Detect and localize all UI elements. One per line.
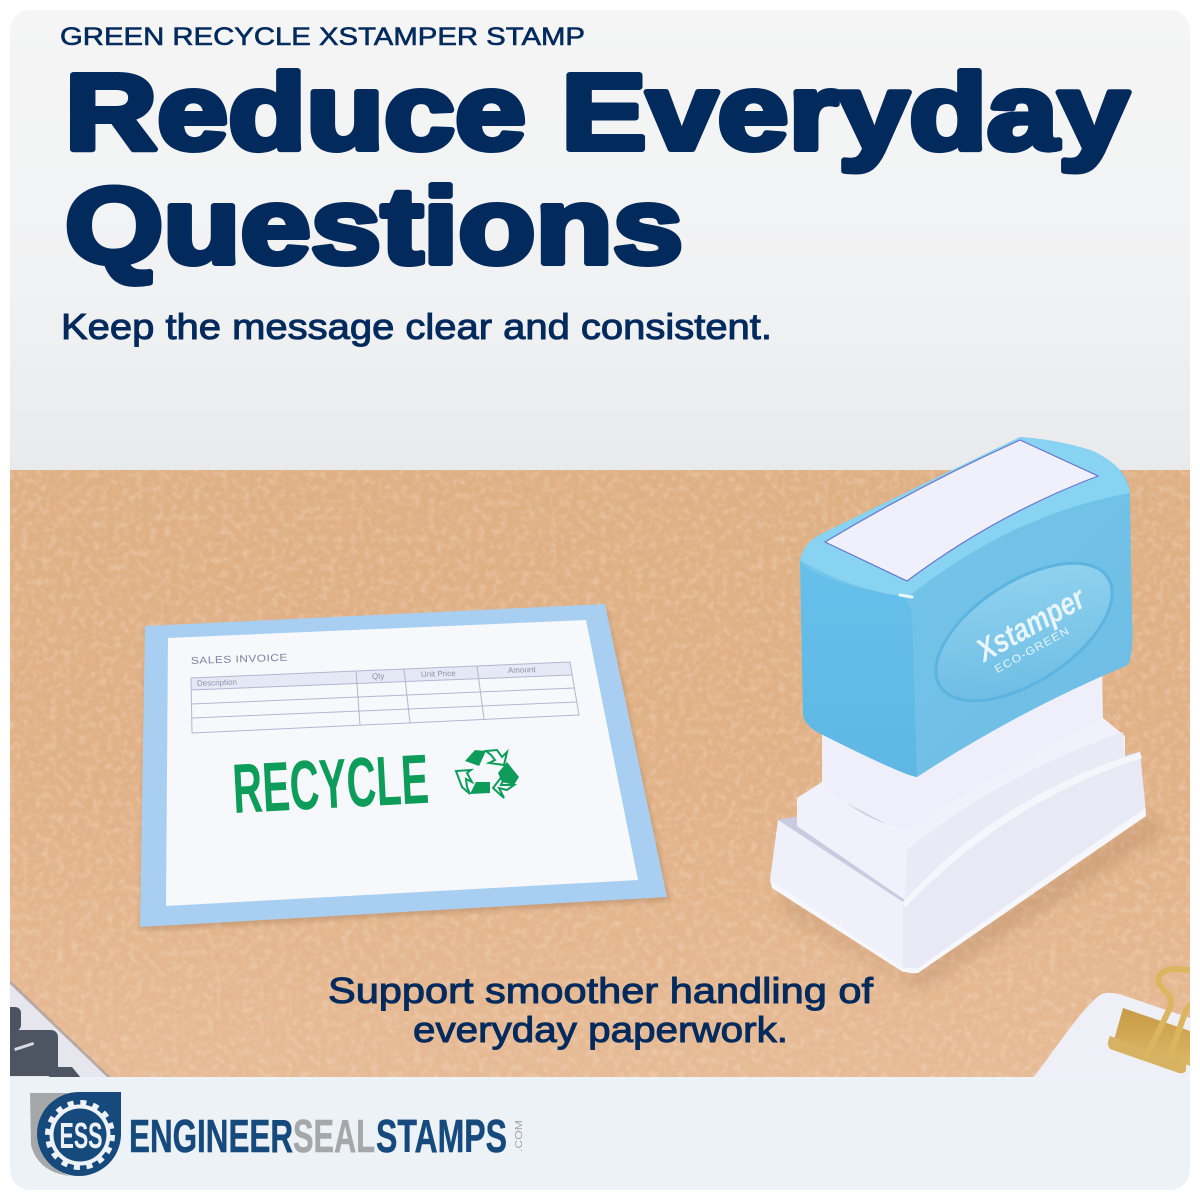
bottom caption: everyday paperwork. xyxy=(413,1009,788,1050)
main title line 1: Reduce Everyday xyxy=(65,51,1129,172)
bottom caption: Support smoother handling of xyxy=(328,970,874,1011)
document on blue backing xyxy=(140,604,670,931)
invoice heading: SALES INVOICE xyxy=(191,653,288,667)
Xstamper brand mark xyxy=(976,590,1082,673)
Xstamper self-inking stamp xyxy=(770,437,1165,990)
recycle symbol xyxy=(456,750,519,798)
invoice table: Description xyxy=(197,678,237,688)
invoice table: Unit Price xyxy=(421,669,456,679)
calculator corner xyxy=(10,980,111,1077)
cap left face xyxy=(800,560,917,777)
gear emblem xyxy=(48,1103,112,1167)
corner highlight xyxy=(900,595,912,597)
paper shadow xyxy=(140,608,670,931)
cork desk surface xyxy=(10,470,1190,1078)
logo shield: ESS xyxy=(60,1115,102,1156)
invoice table xyxy=(191,662,579,733)
stamp lower body xyxy=(797,718,1125,900)
blue cap body xyxy=(800,437,1132,777)
invoice table: Qty xyxy=(372,672,385,681)
white invoice sheet xyxy=(166,620,638,906)
tray front wall xyxy=(903,752,1146,972)
binder clip wires xyxy=(1149,966,1190,1044)
bottom caption xyxy=(328,970,874,1050)
oval logo recess xyxy=(934,562,1114,702)
logo .COM: .COM xyxy=(514,1120,525,1152)
stamp shadow xyxy=(772,815,1165,990)
cap top rim xyxy=(800,437,1130,597)
invoice table: Amount xyxy=(508,665,536,675)
tray interior xyxy=(770,752,1146,902)
stamp neck xyxy=(822,665,1103,835)
tray left wall xyxy=(770,820,903,972)
logo wordmark xyxy=(129,1110,507,1162)
main title line 2: Questions xyxy=(65,165,683,286)
Xstamper brand mark: ECO-GREEN xyxy=(993,625,1072,676)
paper and binder clip xyxy=(1033,969,1190,1078)
Xstamper brand mark: Xstamper xyxy=(969,579,1092,669)
binder clip bar xyxy=(1108,1036,1186,1073)
logo wordmark: SEAL xyxy=(293,1110,375,1162)
footer band xyxy=(10,1077,1190,1190)
white top label xyxy=(825,440,1098,581)
eyebrow heading: GREEN RECYCLE XSTAMPER STAMP xyxy=(60,23,585,51)
subheading: Keep the message clear and consistent. xyxy=(61,306,772,347)
logo: Engineer Seal Stamps xyxy=(30,1092,525,1176)
blue backing sheet xyxy=(140,604,667,927)
logo wordmark: ENGINEER xyxy=(129,1110,293,1162)
logo wordmark: STAMPS xyxy=(376,1110,507,1162)
wall backdrop xyxy=(10,10,1190,471)
logo shield xyxy=(30,1092,121,1176)
stamped RECYCLE text: RECYCLE xyxy=(231,740,431,828)
